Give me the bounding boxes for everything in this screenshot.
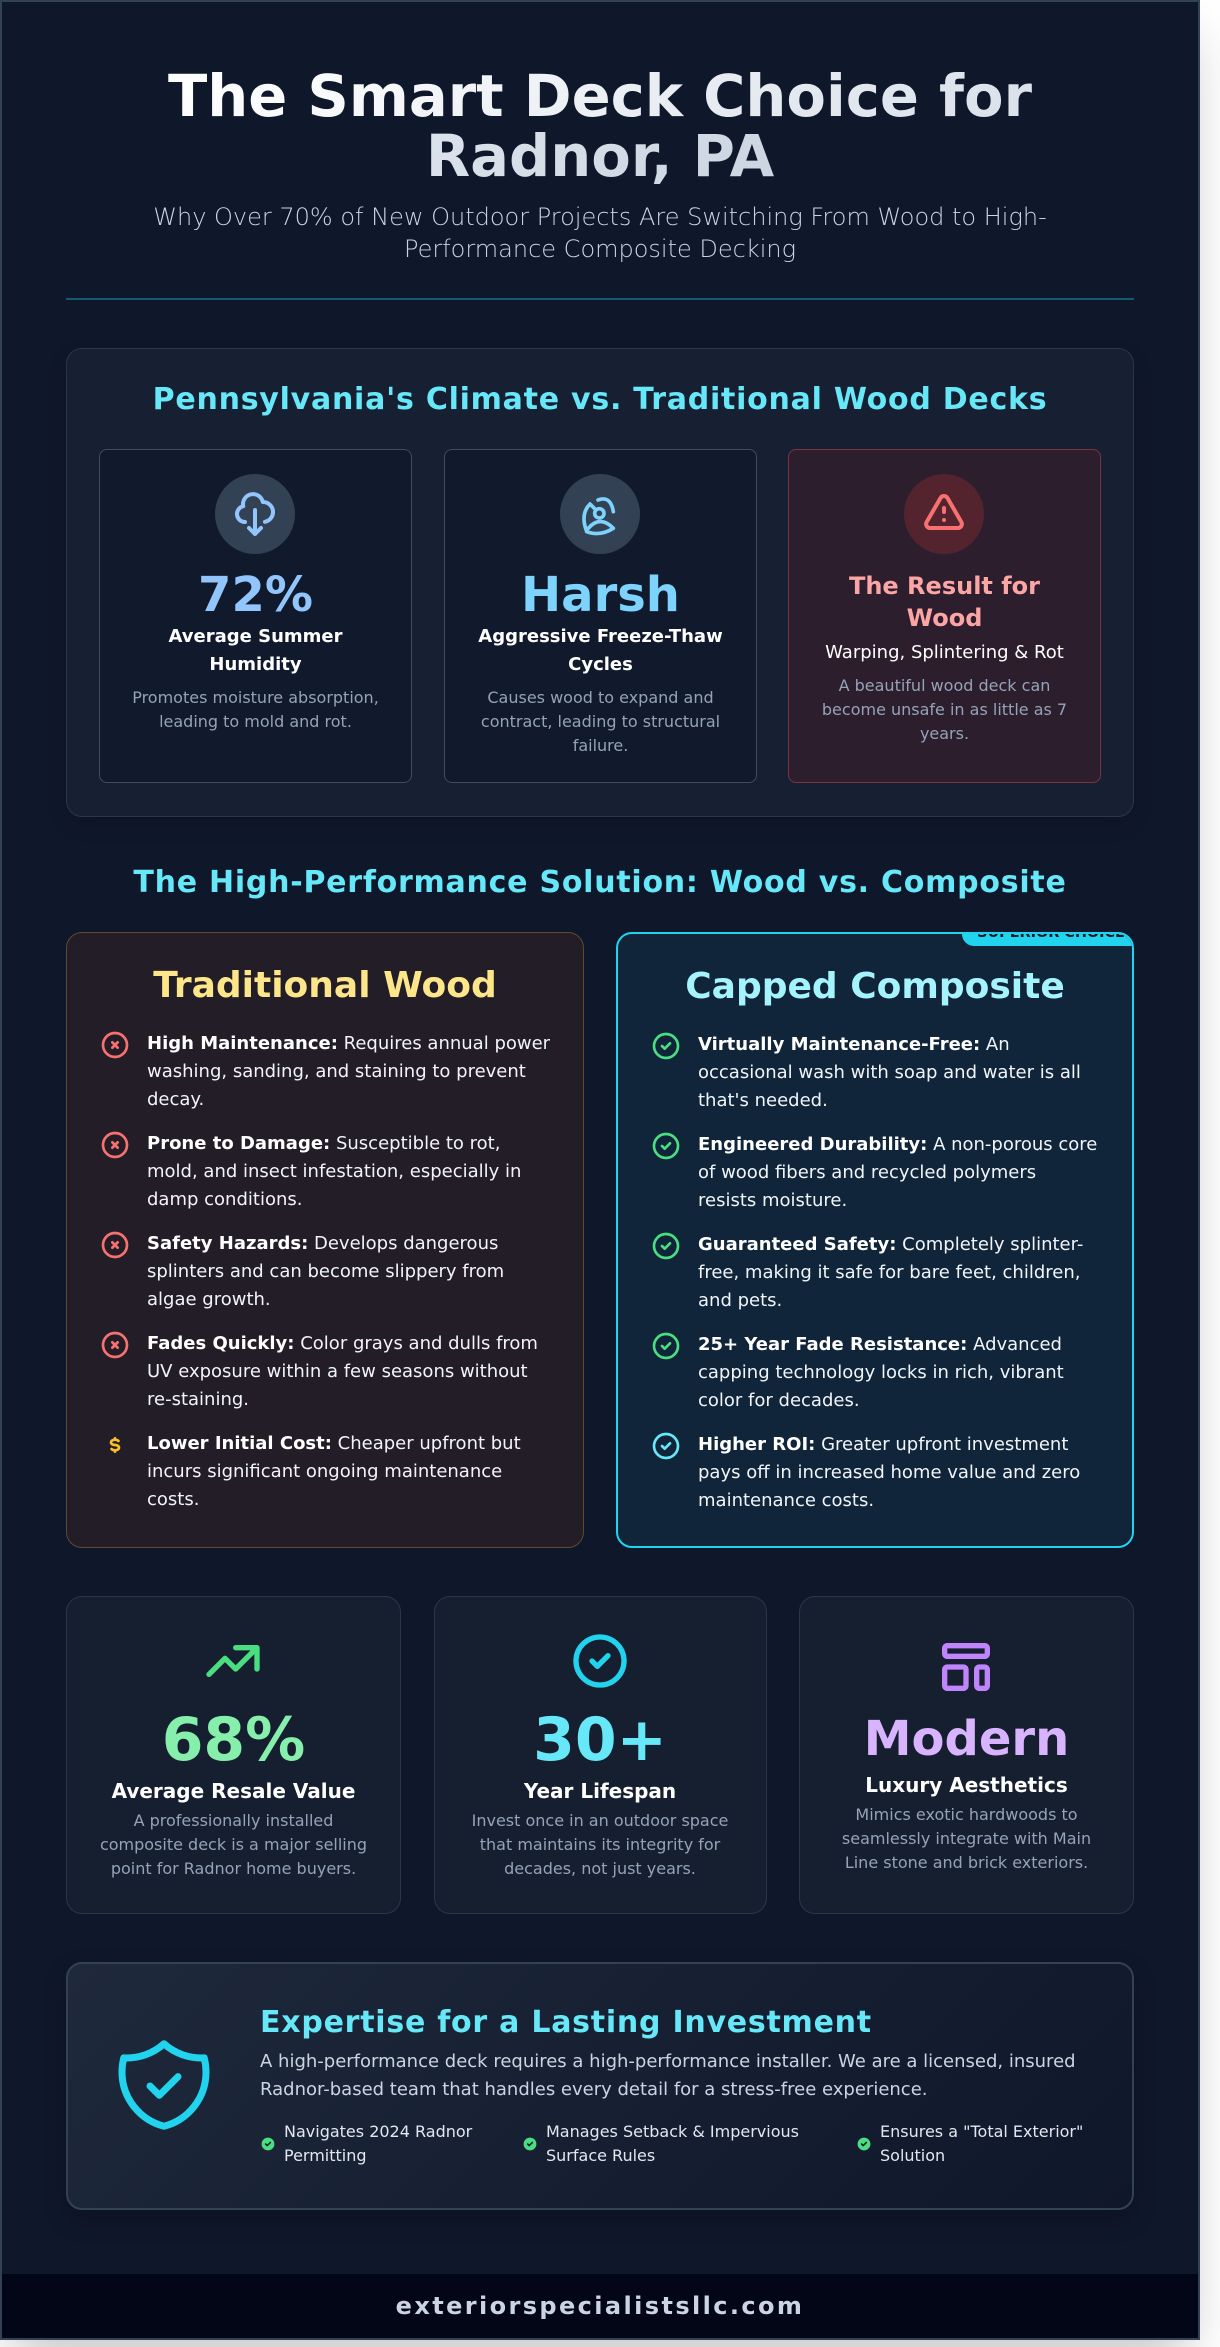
- item: fades quickly: Fades Quickly: Color grays and dulls from: [147, 1333, 538, 1354]
- icon: warning: [904, 474, 984, 554]
- list: wood drawbacks: [102, 1032, 550, 1510]
- stat card: resale value: [66, 1596, 401, 1914]
- icon: check circle: [573, 1634, 627, 1688]
- bullet: setback rules: [524, 2122, 799, 2165]
- label: freeze-thaw: [478, 626, 723, 675]
- item: prone to damage: mold, and insect infestation, especially in: [147, 1161, 521, 1182]
- card: humidity: [99, 449, 412, 783]
- item: high maintenance: decay.: [147, 1089, 204, 1110]
- panel: expertise: [66, 1962, 1134, 2210]
- description: result: [822, 676, 1067, 743]
- item: guaranteed safety: free, making it safe for bare feet, children,: [698, 1262, 1080, 1283]
- item: fade resistance: 25+ Year Fade Resistance: Advanced: [698, 1334, 1062, 1355]
- heading: expertise: Expertise for a Lasting Investment: [260, 2005, 872, 2040]
- item: lower initial cost: Lower Initial Cost: Cheaper upfront but: [147, 1433, 521, 1454]
- list: composite benefits: [652, 1032, 1097, 1511]
- item: higher roi: Higher ROI: Greater upfront investment: [698, 1434, 1068, 1455]
- item: lower initial cost: incurs significant ongoing maintenance: [147, 1461, 502, 1482]
- title: Radnor, PA: [426, 123, 774, 190]
- bullet: permitting: [262, 2122, 472, 2165]
- icon: trending up: [206, 1645, 260, 1677]
- description: lifespan: that maintains its integrity for: [480, 1835, 720, 1854]
- icon: layout template: [942, 1643, 990, 1691]
- item: maintenance free: that's needed.: [698, 1090, 828, 1111]
- panel: capped composite: [616, 932, 1134, 1548]
- stat: Harsh: Harsh: [521, 567, 680, 623]
- card: result for wood: [788, 449, 1101, 783]
- item: fades quickly: [102, 1332, 538, 1410]
- item: fade resistance: color for decades.: [698, 1390, 860, 1411]
- bullet: permitting: Navigates 2024 Radnor: [284, 2122, 472, 2141]
- description: lifespan: decades, not just years.: [504, 1859, 696, 1878]
- item: prone to damage: damp conditions.: [147, 1189, 302, 1210]
- description: result: years.: [920, 724, 969, 743]
- item: guaranteed safety: and pets.: [698, 1290, 782, 1311]
- item: engineered durability: Engineered Durability: A non-porous core: [698, 1134, 1097, 1155]
- stat: 68%: 68%: [162, 1705, 305, 1775]
- heading: solution: The High-Performance Solution: Wood vs. Composite: [133, 865, 1067, 900]
- item: lower initial cost: [110, 1433, 521, 1510]
- item: maintenance free: Virtually Maintenance-Free: An: [698, 1034, 1010, 1055]
- bullet: total exterior: Ensures a "Total Exterior": [880, 2122, 1083, 2141]
- bullet: total exterior: Solution: [880, 2146, 945, 2165]
- description: lifespan: Invest once in an outdoor space: [472, 1811, 728, 1830]
- item: fades quickly: re-staining.: [147, 1389, 249, 1410]
- stat: 72%: 72%: [198, 567, 313, 623]
- description: aesthetics: seamlessly integrate with Main: [842, 1829, 1091, 1848]
- description: expertise: Radnor-based team that handles every detail for a stress-free experience.: [260, 2079, 928, 2100]
- item: higher roi: pays off in increased home value and zero: [698, 1462, 1080, 1483]
- heading: result: Wood: [907, 604, 982, 632]
- description: result: A beautiful wood deck can: [839, 676, 1050, 695]
- item: fade resistance: [652, 1332, 1064, 1411]
- footer: [2, 2274, 1198, 2338]
- item: guaranteed safety: Guaranteed Safety: Completely splinter-: [698, 1234, 1083, 1255]
- description: expertise: A high-performance deck requires a high-performance installer. We are a licensed, insured: [260, 2051, 1076, 2072]
- icon: shield check: [118, 2040, 210, 2130]
- subtitle: [153, 203, 1047, 263]
- title: [168, 63, 1032, 190]
- heading: capped composite: Capped Composite: [685, 966, 1065, 1007]
- item: high maintenance: washing, sanding, and staining to prevent: [147, 1061, 526, 1082]
- heading: traditional wood: Traditional Wood: [153, 965, 497, 1006]
- item: prone to damage: Prone to Damage: Susceptible to rot,: [147, 1133, 500, 1154]
- item: lower initial cost: costs.: [147, 1489, 199, 1510]
- item: fade resistance: capping technology locks in rich, vibrant: [698, 1362, 1064, 1383]
- stat: 30+: 30+: [533, 1705, 667, 1775]
- description: freeze-thaw: failure.: [573, 736, 628, 755]
- subtitle: Why Over 70% of New Outdoor Projects Are Switching From Wood to High-: [153, 203, 1047, 231]
- item: fades quickly: UV exposure within a few seasons without: [147, 1361, 528, 1382]
- description: resale value: [100, 1811, 367, 1878]
- header divider: [66, 298, 1134, 300]
- description: expertise: [260, 2051, 1076, 2100]
- icon: freeze thaw: [560, 474, 640, 554]
- item: high maintenance: High Maintenance: Requires annual power: [147, 1033, 550, 1054]
- description: resale value: A professionally installed: [134, 1811, 333, 1830]
- item: safety hazards: Safety Hazards: Develops dangerous: [147, 1233, 498, 1254]
- item: maintenance free: [652, 1032, 1081, 1111]
- description: freeze-thaw: contract, leading to structural: [481, 712, 720, 731]
- description: humidity: leading to mold and rot.: [159, 712, 352, 731]
- heading: result: [849, 572, 1040, 632]
- badge: superior choice: [962, 932, 1134, 946]
- item: safety hazards: splinters and can become slippery from: [147, 1261, 504, 1282]
- item: engineered durability: of wood fibers and recycled polymers: [698, 1162, 1036, 1183]
- stat card: lifespan: [434, 1596, 766, 1914]
- description: humidity: [132, 688, 379, 731]
- bullet: total exterior: [858, 2122, 1083, 2165]
- item: safety hazards: [102, 1232, 504, 1310]
- description: aesthetics: [842, 1805, 1091, 1872]
- stat: Modern: Modern: [864, 1711, 1069, 1767]
- label: humidity: Humidity: [209, 654, 302, 675]
- panel: climate vs wood: [66, 348, 1134, 817]
- label: resale value: Average Resale Value: [112, 1779, 355, 1803]
- description: resale value: point for Radnor home buyers.: [111, 1859, 356, 1878]
- label: freeze-thaw: Cycles: [568, 654, 633, 675]
- label: humidity: Average Summer: [168, 626, 342, 647]
- heading: climate: Pennsylvania's Climate vs. Traditional Wood Decks: [153, 382, 1047, 417]
- card: freeze-thaw: [444, 449, 757, 783]
- description: freeze-thaw: Causes wood to expand and: [487, 688, 714, 707]
- item: higher roi: [652, 1432, 1080, 1511]
- description: aesthetics: Line stone and brick exteriors.: [845, 1853, 1088, 1872]
- subtitle: Performance Composite Decking: [404, 235, 796, 263]
- item: higher roi: maintenance costs.: [698, 1490, 874, 1511]
- description: aesthetics: Mimics exotic hardwoods to: [855, 1805, 1078, 1824]
- label: aesthetics: Luxury Aesthetics: [865, 1773, 1068, 1797]
- icon: cloud download: [215, 474, 295, 554]
- footer: exteriorspecialistsllc.com: [396, 2292, 804, 2320]
- description: freeze-thaw: [481, 688, 720, 755]
- label: humidity: [168, 626, 342, 675]
- stat card: aesthetics: [799, 1596, 1134, 1914]
- item: prone to damage: [102, 1132, 521, 1210]
- item: high maintenance: [102, 1032, 550, 1110]
- label: freeze-thaw: Aggressive Freeze-Thaw: [478, 626, 723, 647]
- description: result: become unsafe in as little as 7: [822, 700, 1067, 719]
- heading: result: The Result for: [849, 572, 1040, 600]
- item: safety hazards: algae growth.: [147, 1289, 271, 1310]
- title: The Smart Deck Choice for: [168, 63, 1032, 130]
- description: humidity: Promotes moisture absorption,: [132, 688, 379, 707]
- panel: traditional wood: [66, 932, 584, 1548]
- bullet: permitting: Permitting: [284, 2146, 367, 2165]
- item: engineered durability: resists moisture.: [698, 1190, 847, 1211]
- bullet: setback rules: Surface Rules: [546, 2146, 655, 2165]
- label: warping: Warping, Splintering & Rot: [825, 642, 1064, 663]
- label: lifespan: Year Lifespan: [524, 1779, 676, 1803]
- item: maintenance free: occasional wash with soap and water is all: [698, 1062, 1081, 1083]
- description: lifespan: [472, 1811, 728, 1878]
- item: guaranteed safety: [652, 1232, 1083, 1311]
- description: resale value: composite deck is a major selling: [100, 1835, 367, 1854]
- item: engineered durability: [652, 1132, 1097, 1211]
- bullet: setback rules: Manages Setback & Impervious: [546, 2122, 799, 2141]
